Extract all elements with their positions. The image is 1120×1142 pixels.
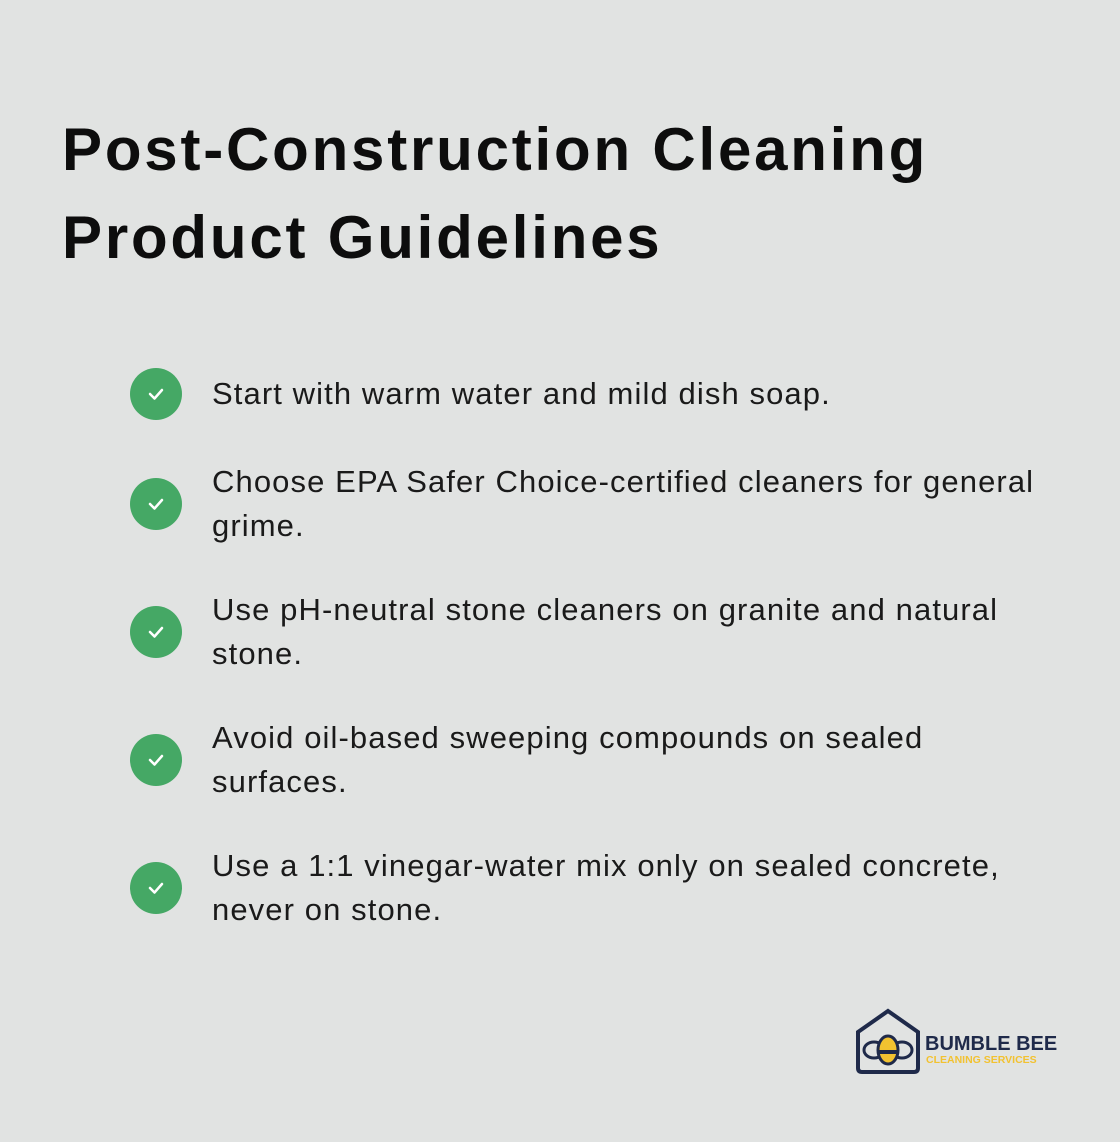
item 5 [130, 848, 1000, 927]
text: surfaces. [212, 764, 348, 799]
title [62, 116, 928, 271]
text: Use pH-neutral stone cleaners on granite and natural [212, 592, 998, 627]
text: never on stone. [212, 892, 442, 927]
item 4 [130, 720, 923, 799]
text: Start with warm water and mild dish soap. [212, 376, 831, 411]
text: Avoid oil-based sweeping compounds on sealed [212, 720, 923, 755]
logo: CLEANING SERVICES [926, 1054, 1037, 1066]
item 2 [130, 464, 1034, 543]
text [212, 592, 998, 671]
text: grime. [212, 508, 305, 543]
icon: check [130, 368, 182, 420]
text [212, 464, 1034, 543]
item 1 [130, 368, 831, 420]
icon: bee house [856, 1008, 920, 1074]
logo text: BUMBLE BEE [925, 1033, 1057, 1055]
icon: check [130, 478, 182, 530]
text [212, 848, 1000, 927]
icon: check [130, 734, 182, 786]
text [212, 720, 923, 799]
title: Product Guidelines [62, 204, 662, 271]
text: Use a 1:1 vinegar-water mix only on sealed concrete, [212, 848, 1000, 883]
text: Choose EPA Safer Choice-certified cleaners for general [212, 464, 1034, 499]
logo [856, 1008, 1057, 1074]
item 3 [130, 592, 998, 671]
icon: check [130, 862, 182, 914]
title: Post-Construction Cleaning [62, 116, 928, 183]
text: stone. [212, 636, 303, 671]
icon: check [130, 606, 182, 658]
